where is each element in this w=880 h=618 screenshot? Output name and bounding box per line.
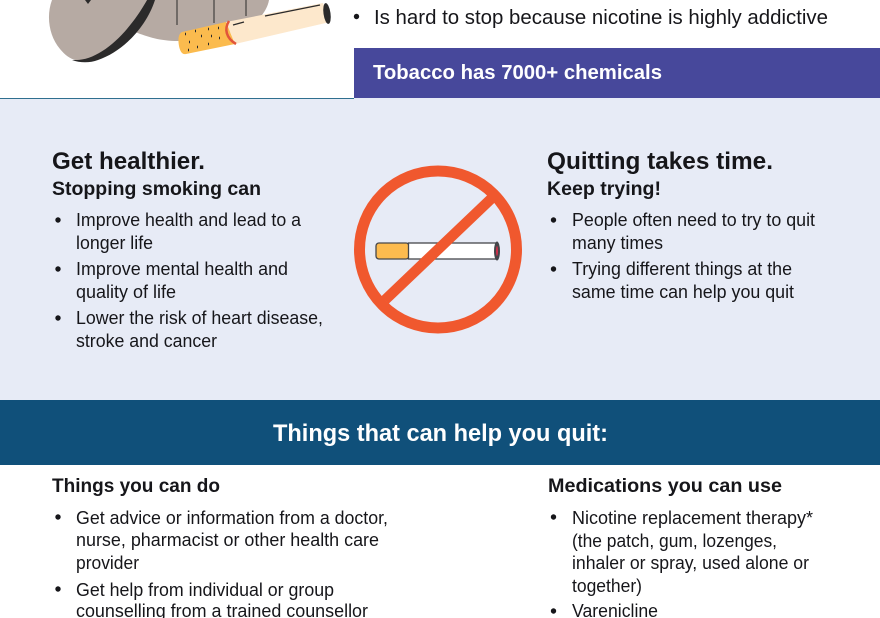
banner: things that can help you quit: [0, 400, 880, 465]
illustration: hand holding cigarette: [49, 0, 332, 62]
text block: quitting takes time: same time can help you quit: [572, 282, 794, 302]
text block: quitting takes time: Trying different things at the: [572, 259, 792, 279]
text block: medications you can use: Medications you can use: [548, 475, 782, 497]
text block: get healthier: quality of life: [76, 282, 176, 302]
text block: quitting takes time: Keep trying!: [547, 178, 661, 200]
text block: get healthier: [52, 148, 323, 351]
text block: quitting takes time: Quitting takes time.: [547, 148, 773, 175]
text block: get healthier: stroke and cancer: [76, 331, 217, 351]
callout: tobacco chemicals: Tobacco has 7000+ chemicals: [373, 62, 662, 84]
text block: things you can do: Get help from individual or group: [76, 580, 334, 600]
text block: medications you can use: together): [572, 576, 642, 596]
text block: get healthier: Improve mental health and: [76, 259, 288, 279]
text block: medications you can use: inhaler or spray, used alone or: [572, 553, 809, 573]
text block: quitting takes time: [547, 148, 815, 302]
text block: things you can do: nurse, pharmacist or other health care: [76, 530, 379, 550]
text block: things you can do: Get advice or information from a doctor,: [76, 508, 388, 528]
text block: get healthier: Lower the risk of heart disease,: [76, 308, 323, 328]
text block: things you can do: [52, 475, 388, 618]
text block: get healthier: longer life: [76, 233, 153, 253]
callout: tobacco chemicals: [354, 48, 880, 98]
banner: things that can help you quit: Things that can help you quit:: [273, 420, 608, 447]
icon: no smoking sign: [360, 171, 516, 328]
text block: get healthier: Stopping smoking can: [52, 178, 261, 200]
bullet: nicotine is addictive: Is hard to stop because nicotine is highly addictive: [374, 6, 828, 29]
text block: quitting takes time: many times: [572, 233, 663, 253]
text block: get healthier: Improve health and lead to a: [76, 210, 302, 230]
text block: get healthier: Get healthier.: [52, 148, 205, 175]
text block: medications you can use: (the patch, gum, lozenges,: [572, 531, 777, 551]
text block: quitting takes time: People often need to try to quit: [572, 210, 815, 230]
text block: things you can do: Things you can do: [52, 475, 220, 497]
text block: things you can do: provider: [76, 553, 139, 573]
text block: medications you can use: [548, 475, 813, 618]
panel: get healthier and keep trying: [0, 98, 880, 400]
text block: medications you can use: Nicotine replacement therapy*: [572, 508, 813, 528]
